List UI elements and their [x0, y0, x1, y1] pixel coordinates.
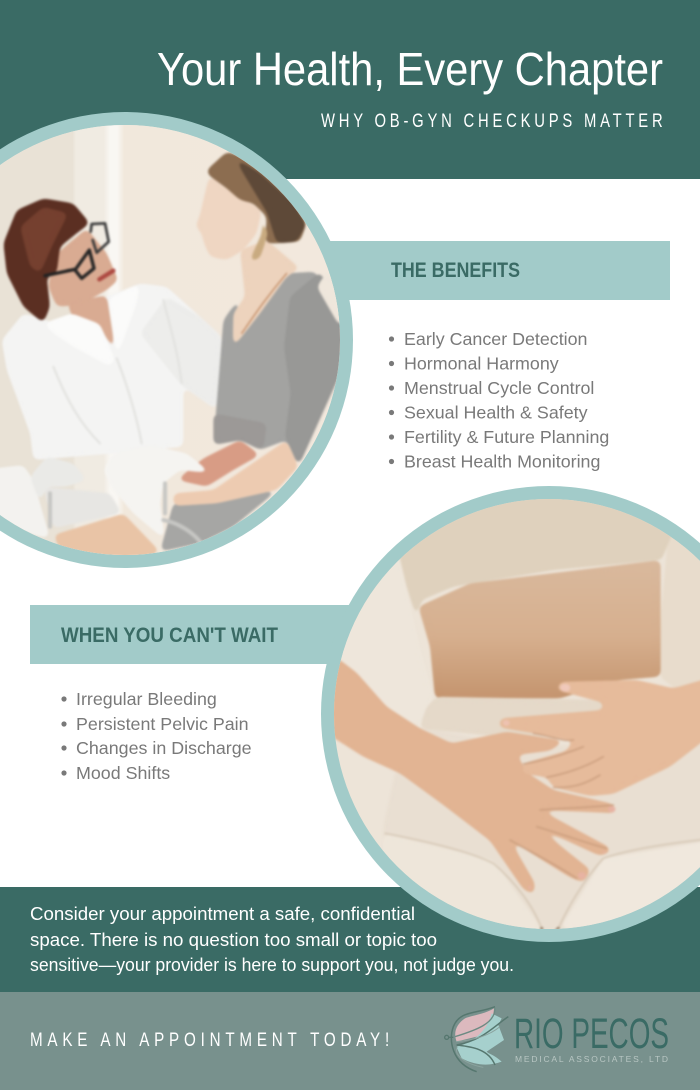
warning signs list: Irregular Bleeding — [76, 689, 217, 709]
benefits list — [389, 329, 609, 472]
panel: when you can't wait — [30, 605, 360, 783]
footer band — [0, 992, 700, 1090]
warning signs list — [61, 689, 252, 783]
patient neck and face — [233, 240, 300, 348]
benefits list: Early Cancer Detection — [404, 329, 587, 349]
logo tagline: MEDICAL ASSOCIATES, LTD — [515, 1054, 668, 1064]
reassurance message: Consider your appointment a safe, confidential — [30, 903, 415, 924]
heading: when you can't wait: WHEN YOU CAN'T WAIT — [61, 624, 278, 647]
right hand — [499, 677, 700, 796]
pants — [544, 928, 566, 929]
call to action: MAKE AN APPOINTMENT TODAY! — [30, 1028, 389, 1050]
header band — [0, 0, 700, 179]
benefits list: Breast Health Monitoring — [404, 452, 600, 472]
background sheets — [661, 537, 700, 687]
reassurance message: sensitive—your provider is here to support you, not judge you. — [30, 954, 514, 975]
benefits list: Fertility & Future Planning — [404, 427, 609, 447]
subtitle: WHY OB-GYN CHECKUPS MATTER — [321, 110, 663, 131]
patient sweater — [214, 270, 318, 450]
bottom message band — [0, 887, 700, 992]
exam chair — [46, 488, 119, 526]
warning heading band — [30, 605, 360, 664]
warning signs list: Changes in Discharge — [76, 738, 252, 758]
benefits heading band — [320, 241, 670, 300]
benefits list: Menstrual Cycle Control — [404, 378, 594, 398]
warning signs list: Mood Shifts — [76, 763, 170, 783]
title: Your Health, Every Chapter — [157, 43, 663, 95]
left hand and arm — [327, 653, 617, 895]
doctor coat — [2, 284, 196, 460]
skirt and arms — [160, 490, 272, 551]
reassurance message — [30, 903, 514, 975]
photo circle: doctor and patient — [0, 112, 353, 568]
benefits list: Hormonal Harmony — [404, 354, 559, 374]
doctor face — [48, 228, 118, 307]
benefits list: Sexual Health & Safety — [404, 402, 588, 422]
crop top — [400, 499, 670, 610]
warning signs list: Persistent Pelvic Pain — [76, 714, 249, 734]
belly — [418, 560, 661, 698]
logo — [445, 1007, 669, 1072]
panel: the benefits — [320, 241, 670, 472]
photo circle: hands on abdomen — [321, 486, 700, 943]
heading: the benefits: THE BENEFITS — [391, 259, 520, 282]
reassurance message: space. There is no question too small or topic too — [30, 929, 437, 950]
icon: butterfly mark — [445, 1007, 508, 1072]
